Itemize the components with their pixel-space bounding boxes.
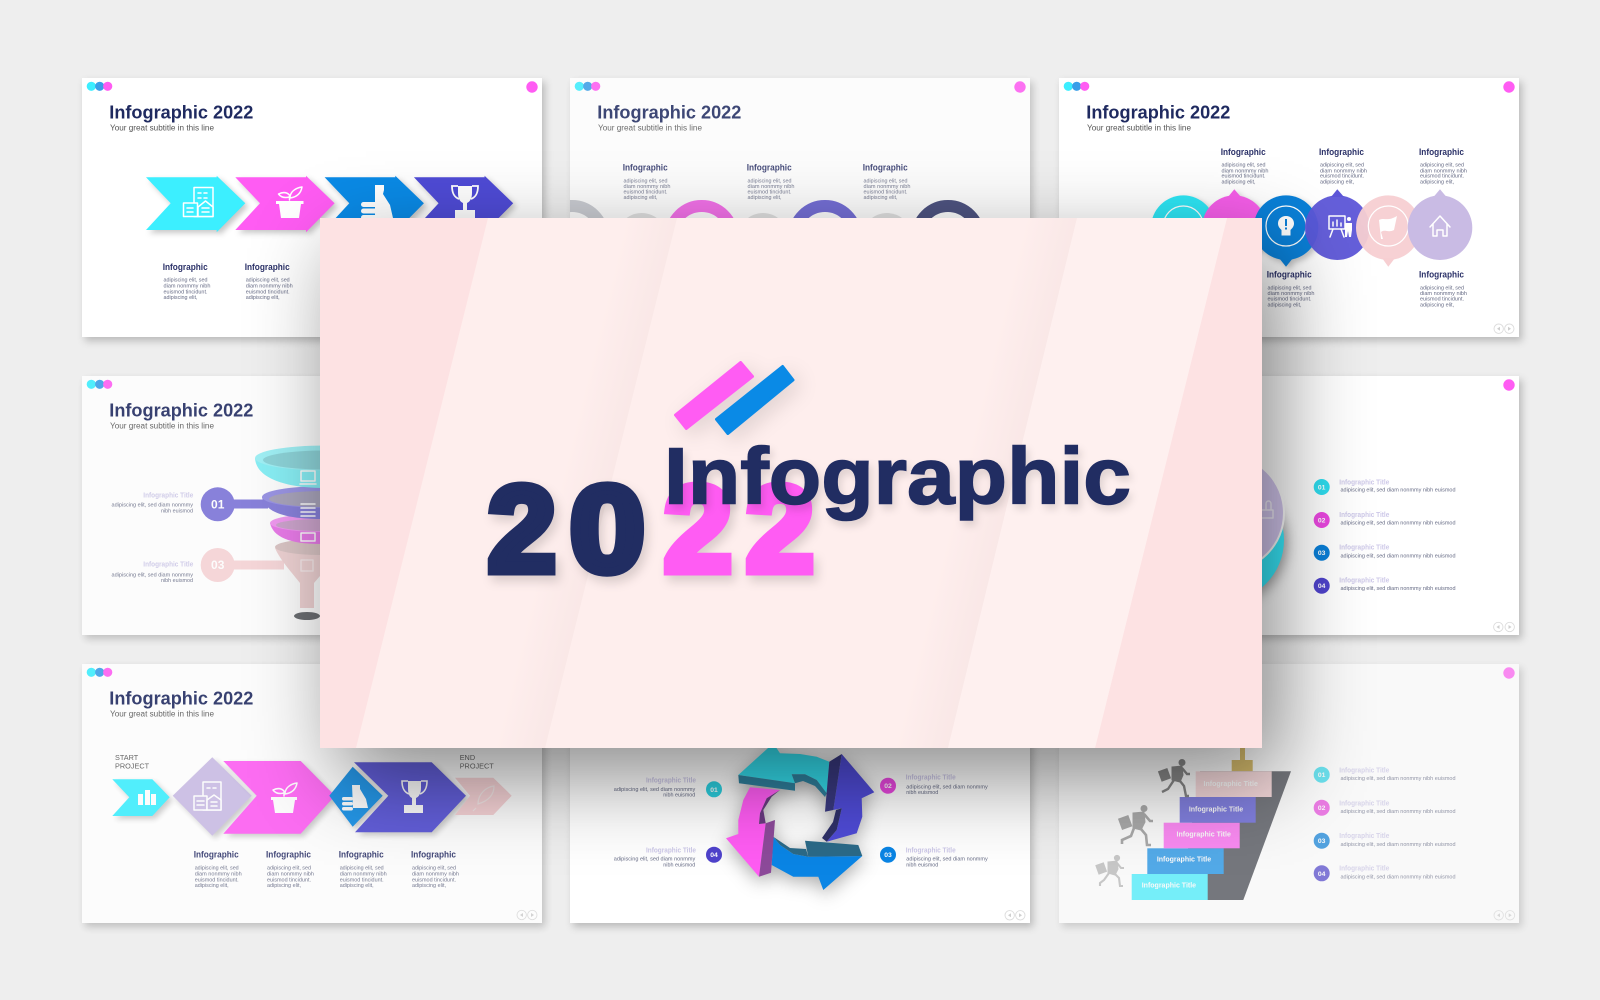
panel: slide 6 donut list [1059,376,1519,635]
slide 1 text block 2: euismod tincidunt. [246,289,290,295]
slide 3 text block top 3 [1419,147,1467,186]
slide 7 text column 1: diam nonmmy nibh [195,872,242,878]
slide 2 text block 1: adipiscing elit, sed [624,178,668,184]
slide 3 text block bottom 2: diam nonmmy nibh [1420,291,1467,297]
slide 8 callout 03: 03 [884,852,892,859]
slide 3 text block top 2: adipiscing elit, sed [1320,162,1364,168]
slide 4 callout 03: 03 [211,558,225,572]
slide 2 text block 1: adipiscing elit, [624,195,658,201]
slide 3 text block bottom 1: euismod tincidunt. [1268,297,1312,303]
step 3 pink [1164,823,1240,848]
cover glass facets [320,218,1262,748]
slides grid behind the cover [81,78,1526,931]
slide 7 text column 2: euismod tincidunt. [267,877,311,883]
slide 9 list item 03: 03 [1318,838,1326,845]
slide 7 text column 3: Infographic [339,850,384,861]
digits 20 navy [488,461,645,598]
slide 8 callout 04: Infographic Title [646,845,696,854]
slide 7 subtitle: Your great subtitle in this line [110,710,215,719]
slide 9 list item 04 [1314,864,1456,881]
slide 3 text block top 1 [1221,147,1268,186]
slide 6 list item 02: adipiscing elit, sed diam nonmmy nibh euismod [1340,520,1456,526]
slide 7 title: Infographic 2022 [109,687,253,708]
slide 3 text block bottom 2: Infographic [1419,269,1464,280]
panel: slide 4 funnel [82,376,542,635]
slide 4 background [82,376,542,635]
slide 4 callout 03: Infographic Title [143,560,193,569]
slide 2 social icons [575,82,600,91]
logo bar blue [716,366,793,434]
slide 4 callout 03: nibh euismod [161,578,193,584]
slide 6 list item 04: Infographic Title [1339,576,1389,585]
slide 6 list item 02: Infographic Title [1339,510,1389,519]
slide 3 text block bottom 2: adipiscing elit, sed [1420,285,1464,291]
slide 4 callout 01: nibh euismod [161,508,193,514]
slide 3 pin: cyan [1151,195,1216,267]
slide 1 social icons [87,82,112,91]
slide 8 callout 01: 01 [710,787,718,794]
slide 3 text block top 3: Infographic [1419,147,1464,158]
slide 6 petal chart [1160,454,1285,602]
slide 3 title: Infographic 2022 [1086,101,1230,122]
big number 2022 [488,461,814,598]
slide 9 list item 01: adipiscing elit, sed diam nonmmy nibh euismod [1340,776,1456,782]
slide 3 text block top 2: Infographic [1319,147,1364,158]
slide 7 background [82,664,542,923]
step 3 pink: Infographic Title [1177,832,1231,839]
slide 1 text block 1: adipiscing elit, [164,295,198,301]
slide 1 text block 1: diam nonmmy nibh [164,284,210,290]
slide 7 text column 4: adipiscing elit, [412,883,446,889]
slide 1 text block 2: adipiscing elit, [246,295,280,301]
slide 9 list item 02: adipiscing elit, sed diam nonmmy nibh euismod [1340,809,1456,815]
start project label: PROJECT [115,762,150,771]
slide 9 list [1314,766,1456,881]
slide 9 list item 04: adipiscing elit, sed diam nonmmy nibh euismod [1340,875,1456,881]
slide 9 list item 03: adipiscing elit, sed diam nonmmy nibh euismod [1340,842,1456,848]
slide 2 ring row [570,200,980,218]
slide 2 text block 2: euismod tincidunt. [748,190,792,196]
slide 3 text block bottom 2 [1419,269,1467,309]
slide 3 text block top 1: adipiscing elit, [1222,180,1256,186]
slide 2 text block 2: Infographic [747,163,792,174]
slide 6 list item 01: adipiscing elit, sed diam nonmmy nibh euismod [1340,488,1456,494]
slide 7 diamond: blue with money icon [329,767,383,827]
slide 3 text block bottom 2: euismod tincidunt. [1420,297,1464,303]
cycle arrow: indigo [822,754,874,842]
slide 7 social icons [87,668,112,677]
slide 9 list item 01: 01 [1318,772,1326,779]
slide 2 title: Infographic 2022 [597,101,741,122]
slide 6 background [1059,376,1519,635]
slide 4 funnel graphic [255,446,395,620]
slide 7 text column 2: diam nonmmy nibh [267,872,314,878]
slide 9 list item 01 [1314,766,1456,783]
slide 4 callout 03 [112,548,284,584]
slide 4 callout 01: adipiscing elit, sed diam nonmmy [112,503,193,509]
step 4 indigo: Infographic Title [1189,806,1243,813]
slide 1 text block 2: Infographic [245,262,290,273]
slide 8 callout 01: nibh euismod [663,793,695,799]
slide 6 list [1314,477,1456,594]
step 5 peach: Infographic Title [1204,781,1258,788]
slide 9 list item 04: Infographic Title [1339,864,1389,873]
step 1 cyan [1132,874,1208,900]
slide 7 arrow: cyan start [112,779,170,816]
slide 8 callout 02: Infographic Title [906,772,956,781]
slide 1 text block 2: adipiscing elit, sed [246,278,290,284]
slide 8 callout 02: 02 [884,783,892,790]
digits 20 navy: 0 [570,462,645,598]
slide 6 list item 03: 03 [1318,550,1326,557]
panel: slide 7 project timeline [82,664,542,923]
slide 7 text column 1 [194,850,242,889]
icon: trophy [452,186,478,218]
slide 8 callout 04 [614,845,722,868]
slide 1 arrow: blue [325,176,424,232]
step 5 peach [1196,771,1272,797]
slide 3 text block bottom 1: adipiscing elit, [1268,303,1302,309]
slide 7 text column 1: euismod tincidunt. [195,877,239,883]
panel: slide 3 pin circles [1059,78,1519,337]
slide 8 callout 04: nibh euismod [663,862,695,868]
slide 8 callout 04: 04 [710,852,718,859]
end project label: PROJECT [460,762,494,771]
slide 7 text column 4: adipiscing elit, sed [412,866,456,872]
runner silhouette bottom [1096,855,1124,886]
slide 2 text block 2: diam nonmmy nibh [748,184,794,190]
slide 3 social icons [1064,82,1089,91]
step 2 blue [1147,848,1224,874]
slide 6 list item 04: 04 [1318,583,1326,590]
slide 7 text column 3 [339,850,387,889]
slide 4 title: Infographic 2022 [109,399,253,420]
slide 7 arrow: pink with plant icon [223,761,335,834]
slide 3 text block top 2: diam nonmmy nibh [1320,168,1367,174]
slide 3 text block top 1: Infographic [1221,147,1266,158]
slide 7 text column 2: Infographic [266,850,311,861]
slide 1 page badge [526,81,538,93]
slide 3 pin: indigo with presenter icon [1305,189,1370,260]
cycle arrow: pink [726,787,780,877]
slide 4 callout 01 [112,487,268,521]
slide 9 list item 01: Infographic Title [1339,766,1389,775]
slide 4 callout 01: Infographic Title [143,490,193,499]
slide 2 text block 3: adipiscing elit, sed [864,178,908,184]
panel: slide 8 cycle arrows [570,664,1030,923]
digits 22 pink [664,461,814,597]
slide 6 list item 03 [1314,543,1456,561]
slide 2 text block 1: diam nonmmy nibh [624,184,670,190]
slide 2 text block 3 [863,163,910,201]
digits 22 pink: 2 [664,461,732,597]
slide 2 text block 2: adipiscing elit, [748,195,782,201]
slide 9 list item 04: 04 [1318,871,1326,878]
slide 1 text block 2: diam nonmmy nibh [246,284,293,290]
slide 9 list item 02: Infographic Title [1339,798,1389,807]
slide 8 navigation buttons [1005,911,1025,920]
slide 3 text block top 3: adipiscing elit, sed [1420,162,1464,168]
slide 1 arrow: indigo [414,176,513,232]
runner silhouette middle [1119,806,1153,845]
runner silhouette top [1159,760,1190,796]
slide 9 list item 02: 02 [1318,805,1326,812]
slide 2 page badge [1014,81,1026,93]
slide 3 pin: blue with bulb icon [1254,195,1318,267]
slide 3 text block top 3: adipiscing elit, [1420,180,1454,186]
slide 7 text column 4 [411,850,459,889]
slide 1 text block 1: adipiscing elit, sed [164,278,208,284]
slide 3 pin: pink [1202,189,1267,260]
slide 2 text block 1 [623,163,670,201]
slide 8 callout 02: adipiscing elit, sed diam nonmmy [906,784,988,790]
slide 3 subtitle: Your great subtitle in this line [1087,124,1192,133]
slide 2 text block 3: euismod tincidunt. [864,190,908,196]
icon: money bag and coins [361,185,393,220]
slide 7 text column 3: adipiscing elit, [340,883,374,889]
cycle arrow: blue [772,837,862,890]
slide 8 callout 03: adipiscing elit, sed diam nonmmy [906,857,988,863]
slide 8 callout 01 [614,775,722,799]
slide 8 callout 01: Infographic Title [646,775,696,784]
slide 3 text block top 1: adipiscing elit, sed [1222,162,1266,168]
step 1 cyan: Infographic Title [1142,882,1196,889]
slide 2 text block 2 [747,163,794,201]
slide 3 background [1059,78,1519,337]
slide 8 callout 03: Infographic Title [906,845,956,854]
slide 2 subtitle: Your great subtitle in this line [598,124,703,133]
slide 8 background [570,664,1030,923]
icon: plant pot [276,187,304,218]
slide 9 page badge [1503,667,1515,679]
slide 7 text column 1: Infographic [194,850,239,861]
slide 7 text column 3: euismod tincidunt. [340,877,384,883]
step 4 indigo [1180,797,1256,823]
slide 6 list item 01 [1314,477,1456,495]
cycle arrow: teal [738,743,829,797]
trophy on top of stairs [1232,745,1253,771]
slide 6 list item 04: adipiscing elit, sed diam nonmmy nibh euismod [1340,586,1456,592]
slide 6 list item 03: adipiscing elit, sed diam nonmmy nibh euismod [1340,554,1456,560]
start project label: START [115,753,139,762]
slide 9 list item 02 [1314,798,1456,816]
slide 8 callout 02 [880,772,988,796]
slide 6 page badge [1503,379,1515,391]
cover card drop shadow and base [320,218,1262,748]
slide 3 text block top 3: diam nonmmy nibh [1420,168,1467,174]
slide 6 list item 03: Infographic Title [1339,543,1389,552]
slide 7 text column 2: adipiscing elit, [267,883,301,889]
slide 2 background [570,78,1030,337]
slide 3 text block top 1: diam nonmmy nibh [1222,168,1268,174]
start project label [115,753,150,771]
slide 7 text column 2 [266,850,314,889]
slide 6 list item 01: Infographic Title [1339,477,1389,486]
slide 1 title: Infographic 2022 [109,101,253,122]
slide 8 callout 04: adipiscing elit, sed diam nonmmy [614,857,696,863]
slide 3 text block top 1: euismod tincidunt. [1222,174,1266,180]
slide 2 text block 1: euismod tincidunt. [624,190,668,196]
panel: slide 9 staircase [1059,664,1519,923]
slide 1 background [82,78,542,337]
slide 6 list item 01: 01 [1318,484,1326,492]
slide 3 navigation buttons [1494,324,1514,333]
slide 8 callout 03 [880,845,988,868]
slide 1 arrow: cyan [146,176,245,232]
slide 4 subtitle: Your great subtitle in this line [110,422,215,431]
slide 7 text column 4: diam nonmmy nibh [412,872,459,878]
panel: slide 1 chevron arrows [82,78,542,337]
slide 9 background [1059,664,1519,923]
logo bar pink [676,362,752,428]
slide 4 social icons [87,380,112,389]
slide 3 text block bottom 1: Infographic [1267,269,1312,280]
slide 3 text block bottom 1 [1267,269,1314,309]
slide 1 arrow: pink [235,176,335,232]
icon: buildings [184,188,213,216]
slide 2 text block 3: diam nonmmy nibh [864,184,910,190]
slide 8 callout 02: nibh euismod [906,790,938,796]
heading Infographic: Infographic [664,431,1131,520]
slide 3 text block top 2: euismod tincidunt. [1320,174,1364,180]
step 2 blue: Infographic Title [1157,856,1211,863]
slide 7 arrow: indigo with trophy icon [354,762,466,832]
slide 1 text block 1: Infographic [163,262,208,273]
staircase side wall [1180,771,1291,900]
slide 6 navigation buttons [1494,622,1514,632]
slide 7 navigation buttons [517,910,537,920]
slide 4 callout 01: 01 [211,498,225,512]
slide 6 list item 02: 02 [1318,518,1326,524]
slide 2 text block 2: adipiscing elit, sed [748,178,792,184]
slide 7 text column 3: adipiscing elit, sed [340,866,384,872]
digits 20 navy: 2 [488,461,556,597]
slide 6 list item 02 [1314,510,1456,528]
slide 7 diamond: lilac with buildings icon [173,757,252,836]
slide 3 text block bottom 2: adipiscing elit, [1420,303,1454,309]
slide 8 callout 01: adipiscing elit, sed diam nonmmy [614,787,696,793]
slide 3 text block bottom 1: diam nonmmy nibh [1268,291,1314,297]
slide 9 list item 03 [1314,831,1456,849]
digits 22 pink: 2 [746,461,814,597]
slide 7 text column 1: adipiscing elit, sed [195,866,239,872]
slide 2 text block 1: Infographic [623,163,668,174]
slide 1 subtitle: Your great subtitle in this line [110,124,215,133]
slide 7 arrow: peach with rocket icon [455,778,512,815]
slide 2 text block 3: Infographic [863,163,908,174]
cycle arrows diagram [726,743,874,890]
slide 7 text column 4: euismod tincidunt. [412,877,456,883]
logo mark [676,362,793,434]
slide 3 pin: peach with flag icon [1356,195,1421,267]
slide 1 text block 2 [245,262,293,301]
end project label [460,753,494,771]
slide 2 text block 3: adipiscing elit, [864,195,898,201]
slide 3 page badge [1503,81,1515,93]
slide 7 text column 3: diam nonmmy nibh [340,872,387,878]
slide 3 text block top 2: adipiscing elit, [1320,180,1354,186]
slide 9 navigation buttons [1494,911,1515,920]
slide 3 text block top 3: euismod tincidunt. [1420,174,1464,180]
slide 8 callout 03: nibh euismod [906,862,938,868]
slide 3 text block bottom 1: adipiscing elit, sed [1268,285,1312,291]
slide 4 callout 03: adipiscing elit, sed diam nonmmy [112,572,193,578]
slide 7 text column 1: adipiscing elit, [195,883,229,889]
slide 3 text block top 2 [1319,147,1367,186]
slide 7 text column 2: adipiscing elit, sed [267,866,311,872]
slide 3 pin: lilac with house icon [1408,189,1472,260]
slide 1 text block 1: euismod tincidunt. [164,289,208,295]
slide 6 list item 04 [1314,576,1456,594]
end project label: END [460,753,475,762]
slide 9 list item 03: Infographic Title [1339,831,1389,840]
slide 1 text block 1 [163,262,210,301]
panel: slide 2 rings [570,78,1036,218]
slide 7 text column 4: Infographic [411,850,456,861]
